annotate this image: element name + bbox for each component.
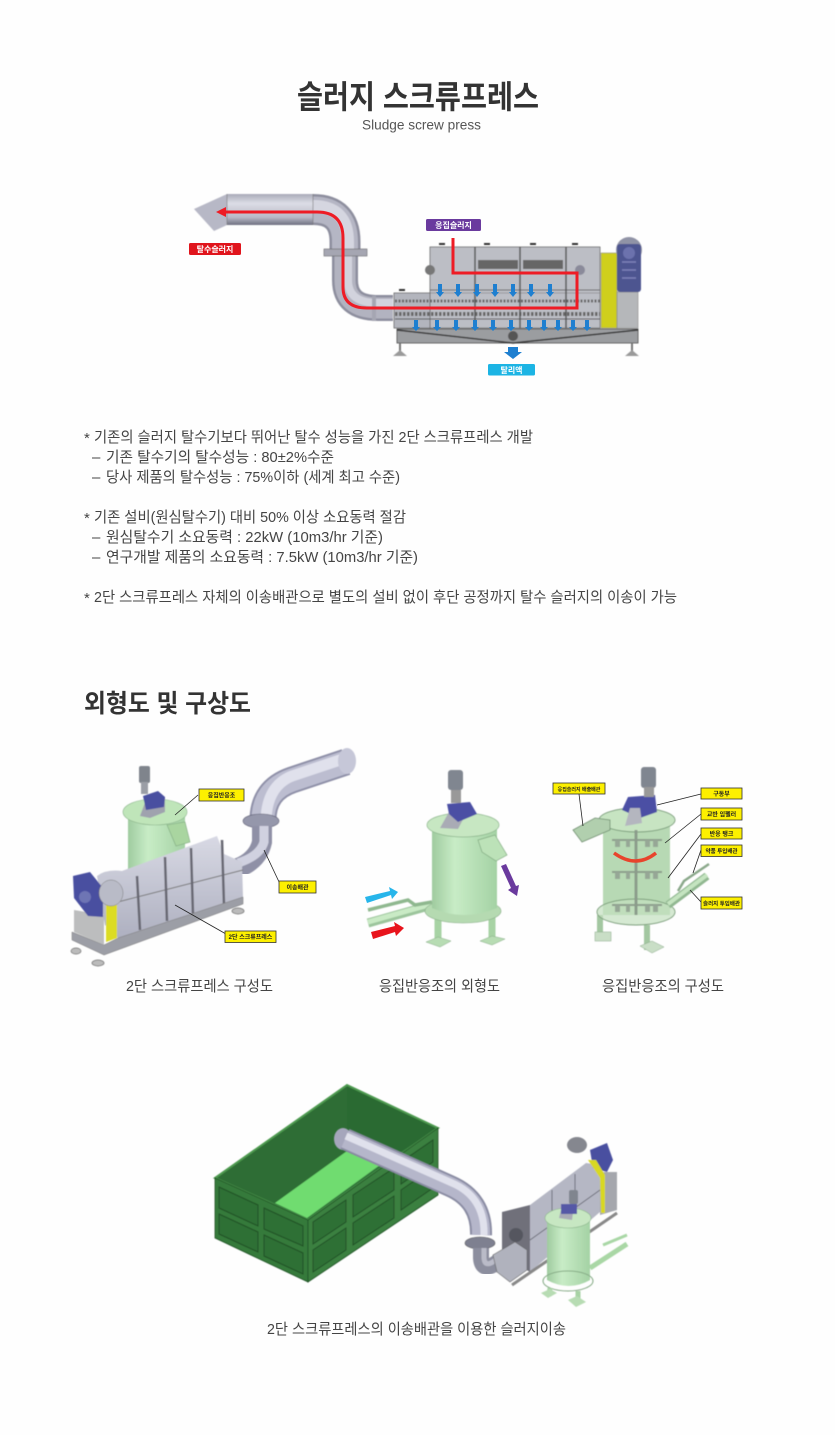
bullet: dewatering performance: 당사 제품의 탈수성능 : 75%이하 (세계 최고 수준): [106, 469, 400, 486]
label: 탈수슬러지: [189, 243, 241, 255]
caption: transfer: 2단 스크류프레스의 이송배관을 이용한 슬러지이송: [267, 1321, 566, 1338]
bullet: power saving: 기존 설비(원심탈수기) 대비 50% 이상 소요동력 절감: [94, 509, 406, 526]
callouts: 교반 임펠러: [707, 810, 736, 818]
caption: press layout: 2단 스크류프레스 구성도: [126, 978, 273, 995]
callouts: 이송배관: [286, 884, 309, 892]
filtrate arrows: [412, 284, 591, 359]
bullet: power saving: [84, 509, 418, 566]
bullet: power saving: *: [84, 510, 90, 527]
arrow: flocculated sludge out: [501, 864, 519, 896]
bullet: power saving: –: [92, 549, 101, 566]
label: 탈수슬러지: 탈수슬러지: [197, 244, 233, 254]
callouts: 슬러지 투입배관: [703, 900, 740, 908]
section heading: 외형도 및 구상도: [84, 690, 251, 718]
bullet: power saving: 원심탈수기 소요동력 : 22kW (10m3/hr 기준): [106, 529, 383, 546]
callouts: 반응 탱크: [710, 830, 734, 838]
red flow line: [216, 207, 577, 308]
diagram: sludge flow through screw press: [189, 194, 642, 376]
bullet: dewatering performance: –: [92, 469, 101, 486]
figure: two-stage screw press layout: [71, 748, 356, 966]
bullet: dewatering performance: *: [84, 430, 90, 447]
bullet: power saving: 연구개발 제품의 소요동력 : 7.5kW (10m3/hr 기준): [106, 549, 418, 566]
label: 응집슬러지: 응집슬러지: [435, 220, 472, 230]
title: 슬러지 스크류프레스: [297, 79, 539, 115]
bullet: dewatering performance: 기존의 슬러지 탈수기보다 뛰어난 탈수 성능을 가진 2단 스크류프레스 개발: [94, 429, 533, 446]
tank: [573, 767, 709, 953]
callouts: 응집슬러지 배출배관: [558, 786, 601, 793]
callouts: 약품 투입배관: [706, 847, 737, 855]
arrow: sludge input: [371, 922, 404, 939]
bullet: dewatering performance: [84, 429, 533, 486]
text block: features: [84, 429, 677, 607]
transfer pipe: [334, 1128, 499, 1267]
press body: [393, 237, 642, 356]
figure: reaction tank exterior: [365, 770, 519, 947]
callouts: [175, 789, 316, 942]
reaction tank: [123, 766, 190, 870]
green container: [215, 1085, 438, 1282]
bullet: dewatering performance: –: [92, 449, 101, 466]
press and tank: [493, 1137, 627, 1307]
press body: [71, 836, 244, 966]
arrow: chemical input: [365, 887, 398, 903]
callouts: 응집반응조: [208, 792, 236, 800]
label: 응집슬러지: [426, 219, 481, 231]
callouts: [553, 783, 742, 909]
caption: tank exterior: 응집반응조의 외형도: [379, 978, 500, 995]
label: 탈리액: 탈리액: [500, 365, 523, 375]
bullet: transfer piping: *: [84, 590, 90, 607]
callouts: 구동부: [713, 791, 730, 798]
caption: tank structure: 응집반응조의 구성도: [602, 978, 724, 995]
rotation arrow: [614, 853, 656, 861]
bullet: power saving: –: [92, 529, 101, 546]
figure: sludge transfer into container: [215, 1085, 627, 1307]
callouts: 2단 스크류프레스: [229, 933, 273, 941]
subtitle: Sludge screw press: [362, 116, 481, 132]
bullet: dewatering performance: 기존 탈수기의 탈수성능 : 80±2%수준: [106, 449, 334, 466]
label: 탈리액: [488, 364, 535, 376]
tank: [368, 770, 507, 947]
discharge pipe: [194, 194, 393, 321]
bullet: transfer piping: 2단 스크류프레스 자체의 이송배관으로 별도의 설비 없이 후단 공정까지 탈수 슬러지의 이송이 가능: [94, 589, 677, 606]
figure: reaction tank cutaway: [553, 767, 742, 953]
transfer pipe: [238, 748, 356, 868]
